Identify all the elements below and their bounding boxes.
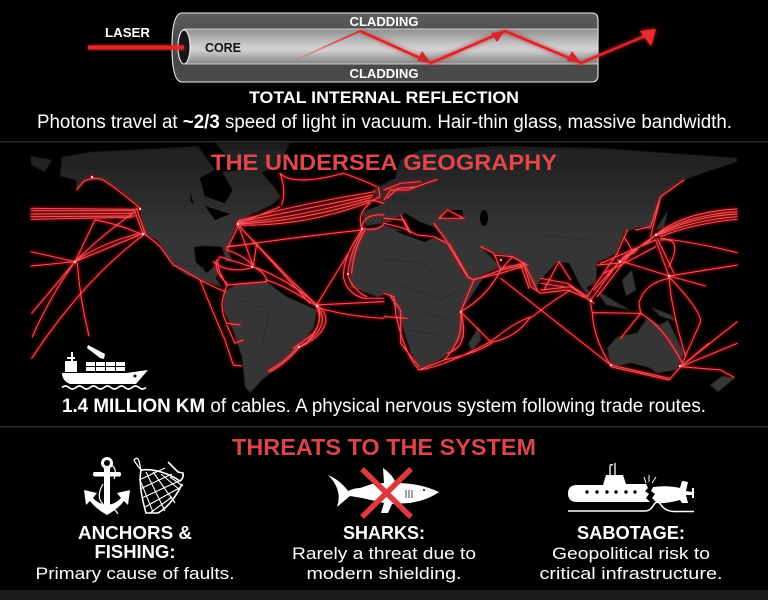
greenland — [215, 143, 290, 172]
heading: threats: THREATS TO THE SYSTEM — [232, 434, 536, 460]
south america — [223, 282, 317, 393]
threat: sharks — [292, 523, 476, 583]
fiber optic diagram — [88, 13, 656, 82]
cable landing points — [74, 176, 681, 367]
eastern russia tip west of map — [31, 156, 52, 172]
americas and pacific cables — [31, 173, 384, 372]
japan and new zealand — [655, 210, 735, 392]
europe asia and oceania cables — [384, 179, 737, 380]
continents — [31, 143, 737, 393]
description: photons: Photons travel at ~2/3 speed of light in vacuum. Hair-thin glass, massive bandwidth. — [37, 112, 732, 133]
icon: fishing net — [134, 458, 183, 513]
north america — [60, 146, 281, 287]
icon: submarine and cable — [568, 463, 694, 512]
laser beam — [88, 46, 184, 50]
cladding label bottom: CLADDING — [350, 67, 418, 81]
heading: total internal reflection: TOTAL INTERNAL REFLECTION — [249, 88, 519, 107]
core end face — [178, 30, 190, 64]
threat: sharks: SHARKS: — [343, 523, 425, 543]
threat: sabotage — [540, 523, 722, 583]
heading: undersea geography: THE UNDERSEA GEOGRAPHY — [211, 150, 557, 175]
icon: cargo ship — [62, 345, 148, 389]
cladding tube — [172, 13, 598, 82]
threat: anchors and fishing: ANCHORS & — [78, 523, 192, 543]
glass core — [178, 29, 598, 64]
threat: anchors and fishing: Primary cause of faults. — [36, 564, 235, 583]
icon: shark with red cross — [328, 468, 439, 517]
australia — [607, 318, 684, 373]
divider top — [0, 141, 768, 142]
reflecting light path — [289, 29, 656, 63]
threat: sabotage: SABOTAGE: — [577, 523, 685, 543]
indonesia — [596, 270, 636, 310]
threat: sabotage: Geopolitical risk to — [552, 544, 710, 563]
madagascar — [468, 326, 481, 351]
country borders — [140, 195, 620, 345]
threat: anchors and fishing — [36, 523, 235, 583]
laser label: LASER — [105, 25, 151, 40]
core label: CORE — [205, 41, 241, 55]
divider middle — [0, 426, 768, 428]
icon: anchor — [84, 458, 130, 515]
cable network — [31, 173, 737, 380]
statistic: cable length: 1.4 MILLION KM of cables. A physical nervous system following trade routes. — [62, 396, 706, 417]
africa — [350, 225, 484, 370]
cladding label top: CLADDING — [350, 15, 418, 29]
threat: sharks: Rarely a threat due to — [292, 544, 476, 563]
threat: sabotage: critical infrastructure. — [540, 564, 722, 583]
eurasia — [362, 146, 737, 303]
panel: world map — [31, 143, 737, 393]
bottom band — [0, 590, 768, 600]
new guinea — [651, 307, 678, 322]
threat: anchors and fishing: FISHING: — [94, 542, 176, 562]
inland seas and lakes — [190, 172, 488, 242]
threat: sharks: modern shielding. — [306, 564, 462, 583]
